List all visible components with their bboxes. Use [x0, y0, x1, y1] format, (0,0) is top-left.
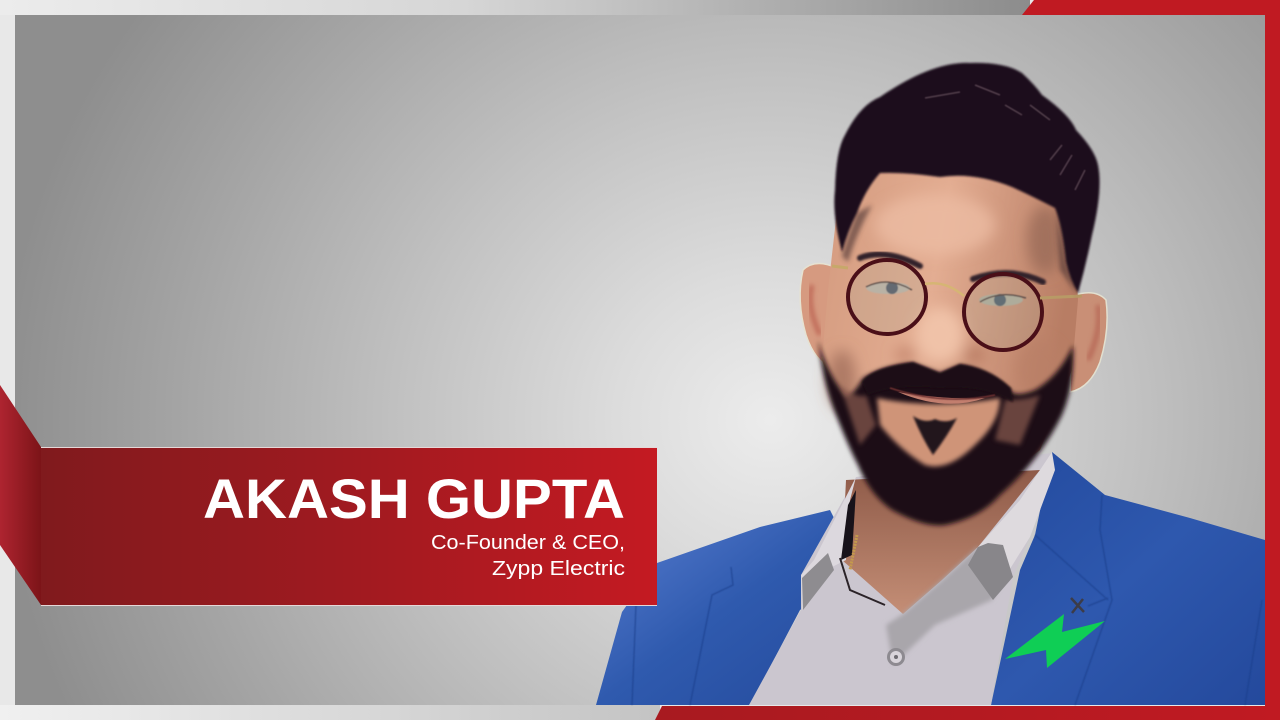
glasses [832, 260, 1082, 350]
face [822, 140, 1078, 510]
lightning bolt badge [1005, 614, 1105, 668]
shirt placket shadow [886, 547, 1003, 665]
shadow inside collar [841, 490, 856, 560]
left ribbon fold [0, 385, 41, 605]
moustache [862, 362, 1013, 402]
gold chain [850, 535, 857, 570]
collar edge line [840, 558, 885, 605]
portrait: Akash Gupta [596, 63, 1265, 705]
shirt [749, 453, 1052, 705]
hair highlights [925, 85, 1085, 190]
eyes [866, 282, 1026, 306]
chin skin [877, 398, 1000, 466]
right ear [1070, 293, 1107, 392]
jacket left side [596, 510, 860, 705]
left ear [800, 263, 837, 368]
company: Zypp Electric [492, 558, 625, 580]
smile [898, 392, 985, 404]
sparse cheek stubble [840, 385, 1040, 445]
collar left [801, 477, 856, 610]
shirt button [887, 648, 905, 666]
soul patch [913, 416, 957, 455]
name banner [41, 447, 657, 606]
lapel pin [1071, 598, 1084, 613]
jacket right side [991, 452, 1265, 705]
collar right [978, 452, 1055, 580]
name: AKASH GUPTA [203, 467, 625, 530]
temple fades [842, 205, 1078, 296]
red frame accents [655, 0, 1280, 720]
eyebrows [860, 254, 1043, 282]
neck [842, 470, 1040, 614]
job title: Co-Founder & CEO, [431, 532, 625, 554]
jacket seams [632, 495, 1262, 705]
hair [834, 63, 1100, 293]
beard [818, 340, 1073, 525]
face highlights [828, 195, 1064, 410]
